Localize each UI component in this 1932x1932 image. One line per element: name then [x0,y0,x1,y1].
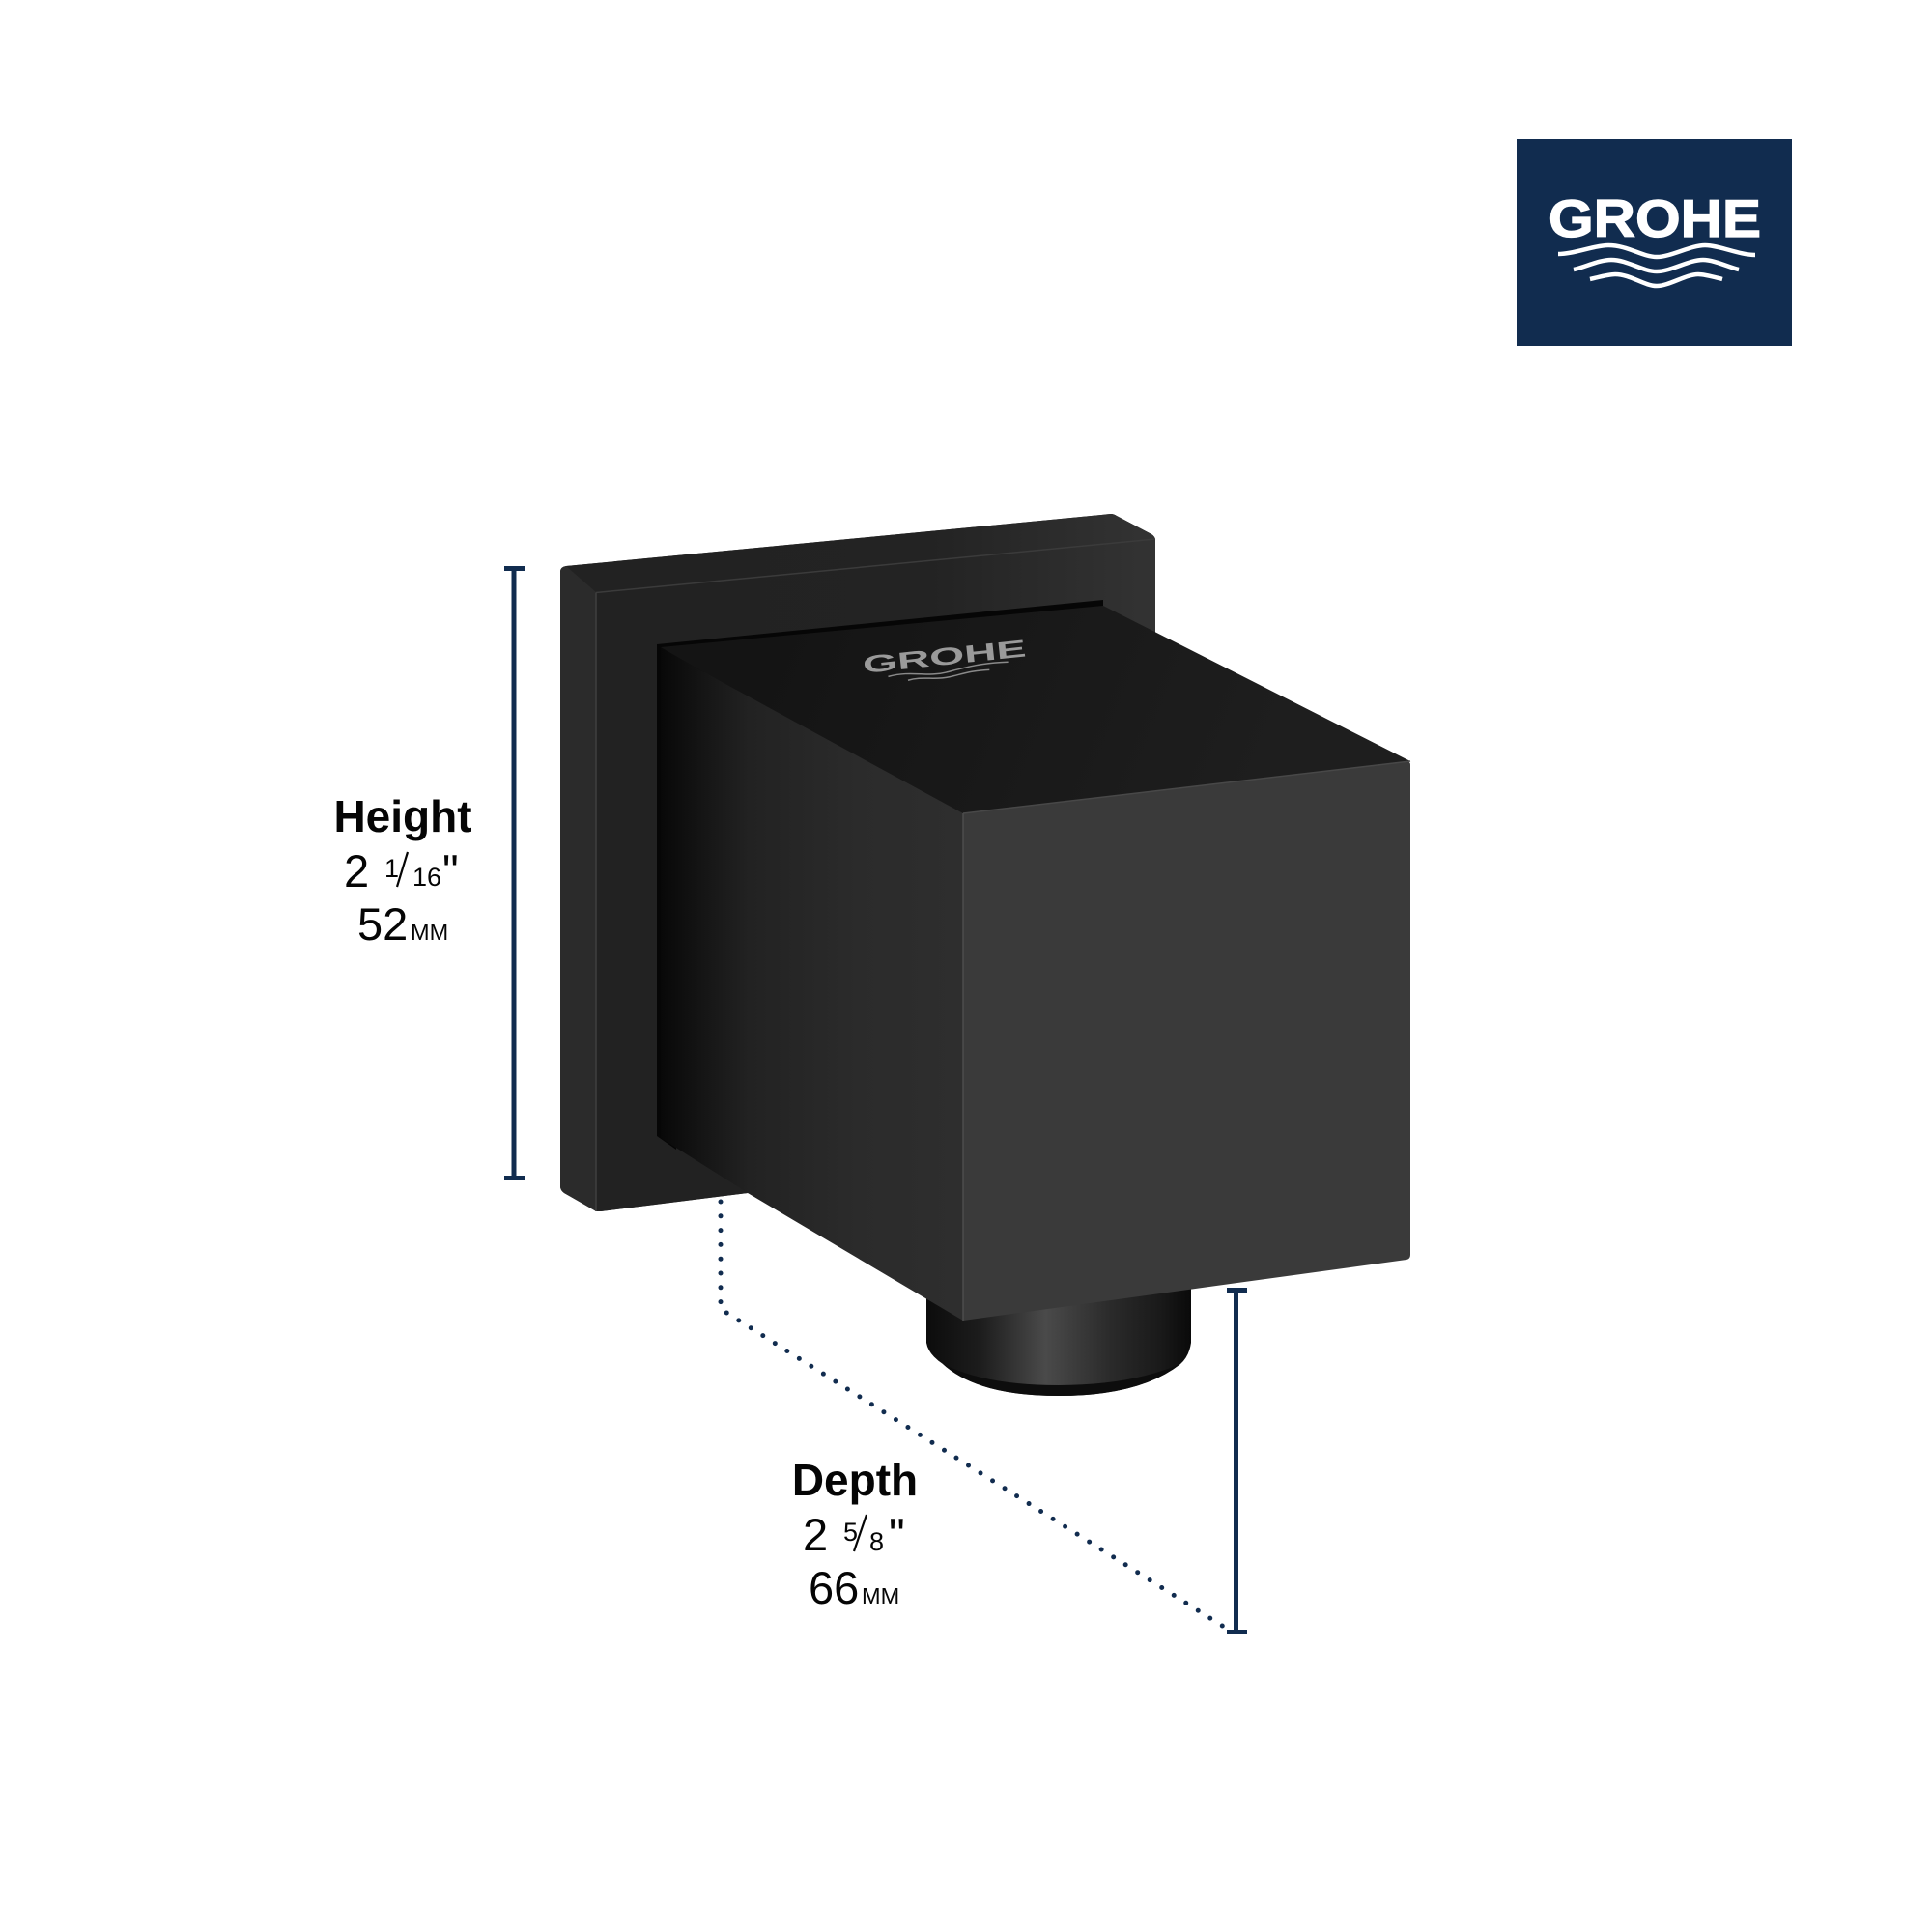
depth imperial value: 2 [803,1509,828,1560]
height imperial value: 2 [344,845,369,896]
top face [661,606,1410,813]
depth label [792,1455,918,1613]
depth dotted guide line [721,1202,1227,1629]
height label [333,791,472,950]
height label: Height [333,791,472,841]
depth imperial value [803,1509,905,1560]
depth imperial value: 5 [843,1518,858,1547]
product: shower wall outlet [560,514,1410,1396]
height imperial value [344,845,459,896]
logo: GROHE badge: GROHE [1548,188,1761,248]
depth imperial value: " [889,1509,905,1560]
depth dimension bar [1227,1288,1247,1634]
embossed GROHE mark [862,635,1028,686]
height metric value: MM [411,920,448,945]
depth metric value [809,1562,899,1613]
height metric value [357,898,448,950]
height imperial value: 16 [412,863,441,892]
depth metric value: 66 [809,1562,859,1613]
logo: GROHE badge [1517,139,1792,346]
depth label: Depth [792,1455,918,1505]
front face [963,761,1410,1321]
height imperial value: " [442,845,459,896]
side face [661,647,963,1321]
depth imperial value: 8 [869,1527,884,1556]
height imperial value: 1 [384,854,399,883]
recessed collar [657,600,1103,1150]
cylinder outlet [926,1275,1191,1396]
embossed GROHE mark: GROHE [862,635,1028,679]
wall plate [560,514,1155,1211]
height dimension bar [504,566,525,1180]
height metric value: 52 [357,898,408,950]
depth metric value: MM [862,1583,899,1608]
